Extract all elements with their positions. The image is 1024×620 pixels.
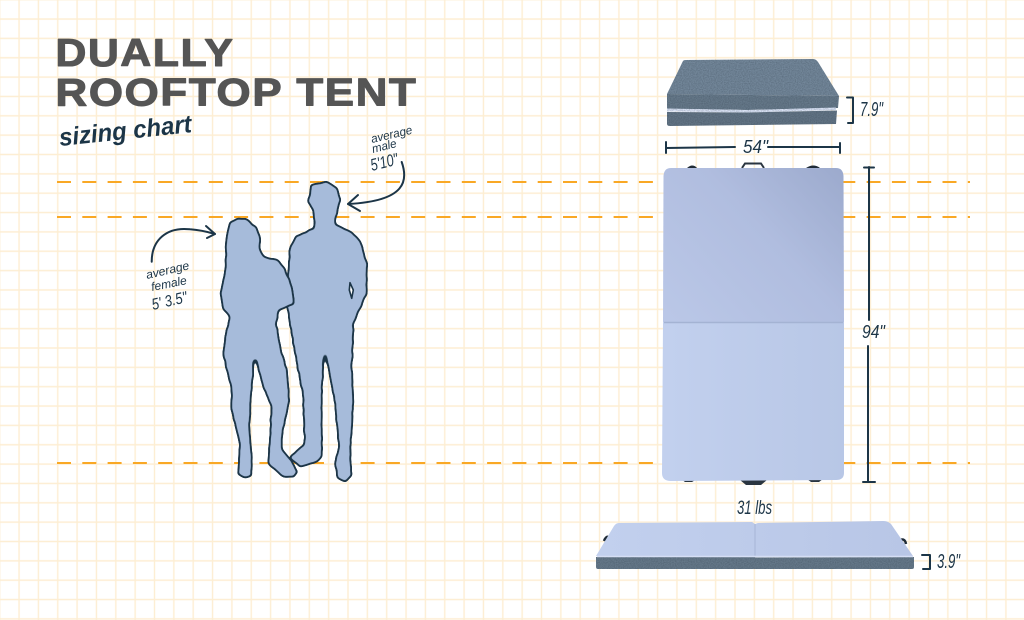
- dimension: 54 inches: [666, 137, 840, 157]
- lower mattress panel: [662, 322, 844, 481]
- arrow: male height: [348, 162, 404, 211]
- dimension: 3.9 inches: 3.9": [937, 551, 961, 573]
- title: DUALLY: [56, 32, 234, 75]
- label: average male: [368, 123, 414, 175]
- dimension: 7.9 inches: [847, 98, 884, 123]
- title: ROOFTOP TENT: [56, 72, 418, 114]
- height reference lines: [57, 182, 970, 463]
- folded white seam: [667, 108, 836, 112]
- silhouette: average female: [220, 217, 299, 479]
- folded mattress: [667, 59, 839, 126]
- fold crease: [754, 524, 756, 556]
- dimension: 94 inches: [862, 167, 886, 482]
- subtitle: sizing chart: sizing chart: [58, 110, 194, 152]
- upper mattress panel: [663, 168, 844, 322]
- label: average male: average: [370, 123, 414, 146]
- weight label: 31 lbs: [737, 498, 772, 519]
- dimension: 94 inches: 94": [862, 322, 886, 342]
- mattress top-down view: [662, 164, 844, 485]
- folded upper band: [667, 94, 839, 110]
- dimension: 54 inches: 54": [743, 137, 770, 157]
- folded top surface: [667, 59, 839, 96]
- dimension: 7.9 inches: 7.9": [860, 99, 884, 121]
- label: average male: 5'10": [368, 150, 401, 175]
- arrow: female height: [152, 226, 215, 262]
- mattress unfolded side view: [596, 521, 914, 569]
- side handles: [604, 537, 906, 544]
- label: average male: male: [370, 136, 398, 156]
- label: average female: 5' 3.5": [150, 289, 190, 314]
- folded lower band: [667, 110, 837, 126]
- male hand gap: [349, 283, 353, 298]
- unfolded front edge: [596, 557, 914, 569]
- mattress crease: [664, 322, 843, 324]
- dimension: 3.9 inches: [922, 551, 961, 573]
- label: average female: female: [150, 273, 188, 294]
- carry handles: [687, 166, 820, 168]
- label: average female: average: [145, 258, 191, 282]
- title: [56, 32, 418, 114]
- label: average female: [145, 258, 191, 314]
- unfolded top surface: [596, 521, 913, 556]
- front rim highlight: [597, 556, 913, 558]
- silhouette: average male: [286, 180, 368, 483]
